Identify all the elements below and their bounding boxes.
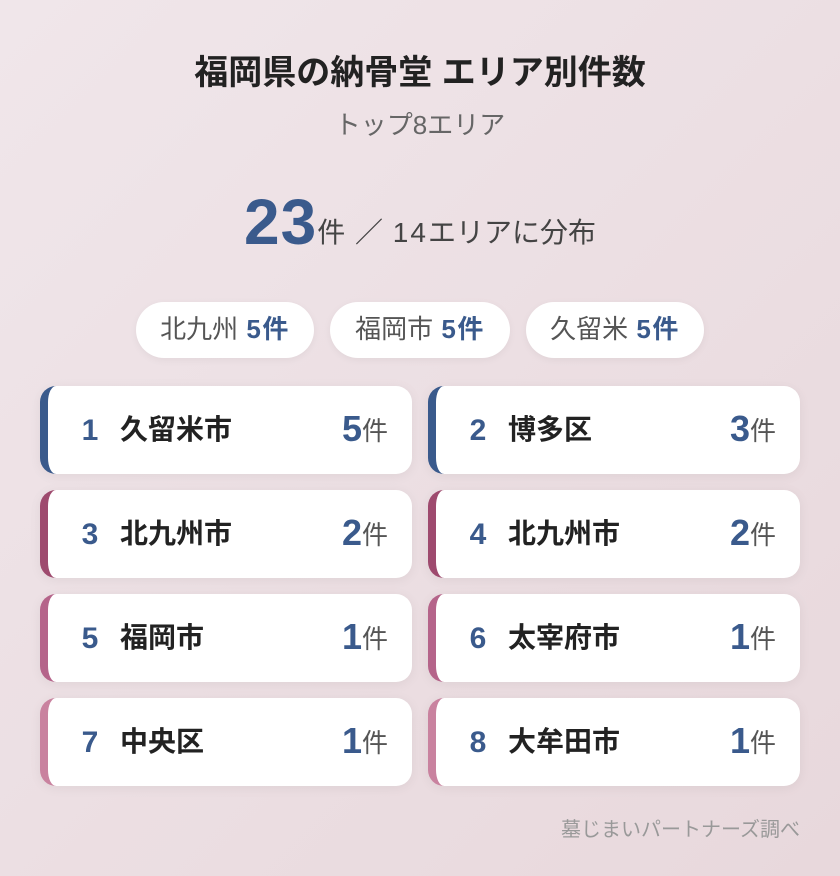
card: rank 6: 1件	[730, 616, 776, 657]
card: rank 7: 1件	[342, 720, 388, 761]
card: rank 2: 博多区	[508, 414, 592, 445]
card: rank 6	[428, 594, 800, 682]
card: rank 3: 北九州市	[120, 518, 232, 549]
pill: 福岡市	[330, 302, 510, 358]
card: rank 6: 太宰府市	[508, 622, 620, 653]
card: rank 4: 4	[470, 518, 486, 551]
card: rank 3: 2件	[342, 512, 388, 553]
title: 福岡県の納骨堂 エリア別件数	[194, 54, 646, 92]
card: rank 1: 久留米市	[120, 414, 232, 445]
card: rank 8	[428, 698, 800, 786]
pill: 北九州: 北九州 5件	[160, 314, 290, 344]
card: rank 5: 5	[82, 622, 98, 655]
card: rank 1: 1	[82, 414, 98, 447]
card: rank 2: 2	[470, 414, 486, 447]
card: rank 1: 5件	[342, 408, 388, 449]
card: rank 6: 6	[470, 622, 486, 655]
card: rank 8: 大牟田市	[508, 726, 620, 757]
card: rank 3: 3	[82, 518, 98, 551]
card: rank 4: 北九州市	[508, 518, 620, 549]
card: rank 2	[428, 386, 800, 474]
source note: 墓じまいパートナーズ調べ	[561, 819, 800, 841]
subtitle: トップ8エリア	[335, 110, 505, 140]
card: rank 5	[40, 594, 412, 682]
pill: 久留米	[526, 302, 704, 358]
pill: 福岡市: 福岡市 5件	[355, 314, 485, 344]
card: rank 7: 中央区	[120, 726, 204, 757]
pill: 久留米: 久留米 5件	[550, 314, 680, 344]
card: rank 1	[40, 386, 412, 474]
card: rank 5: 福岡市	[120, 622, 204, 653]
card: rank 4: 2件	[730, 512, 776, 553]
card: rank 8: 1件	[730, 720, 776, 761]
pill: 北九州	[136, 302, 314, 358]
summary stat: 23件 ／ 14エリアに分布	[244, 186, 596, 258]
card: rank 5: 1件	[342, 616, 388, 657]
card: rank 3	[40, 490, 412, 578]
card: rank 7	[40, 698, 412, 786]
card: rank 2: 3件	[730, 408, 776, 449]
card: rank 4	[428, 490, 800, 578]
card: rank 8: 8	[470, 726, 486, 759]
card: rank 7: 7	[82, 726, 98, 759]
